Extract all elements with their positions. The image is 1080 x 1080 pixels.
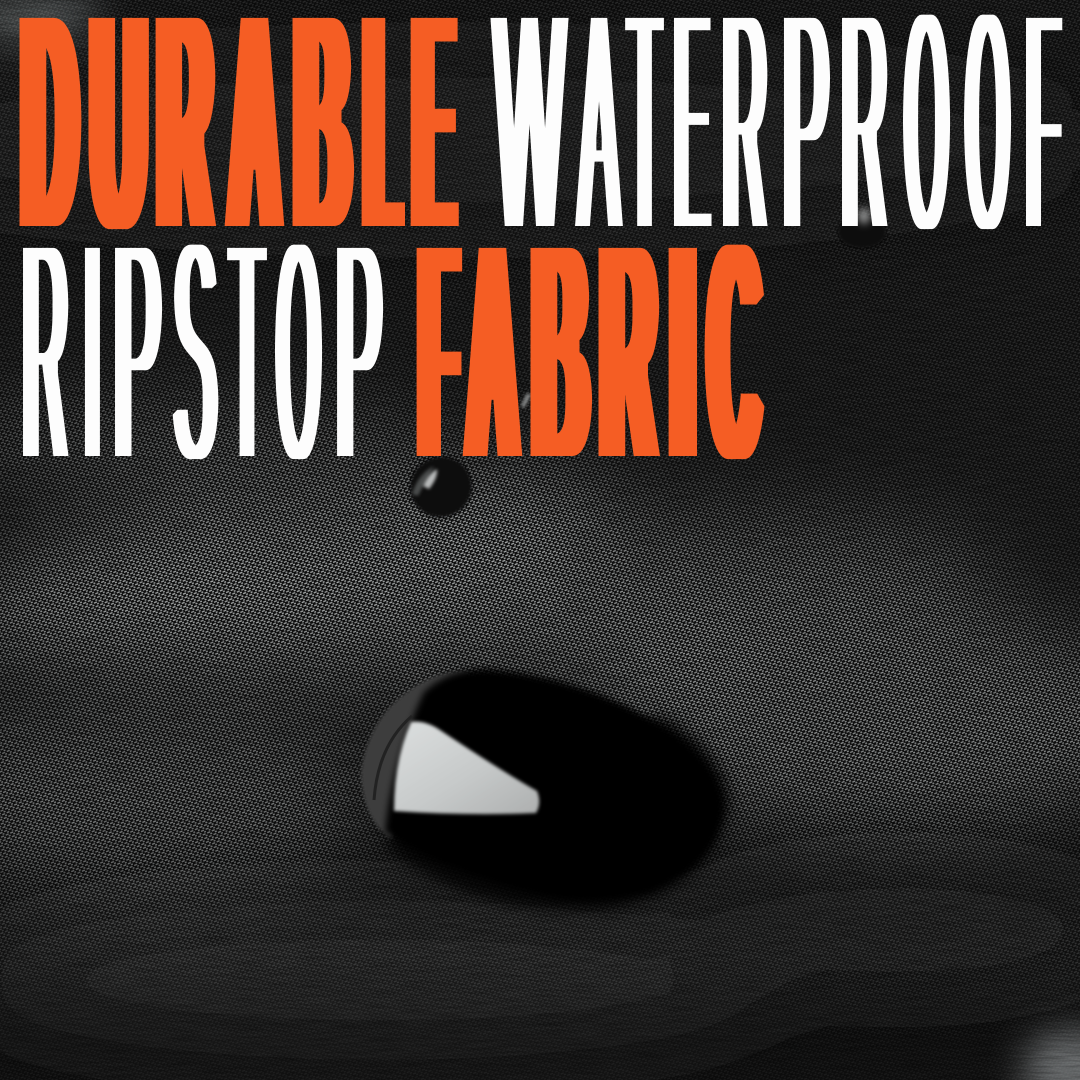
small water drop, right [838, 208, 886, 248]
title: white words [23, 0, 1059, 531]
tiny droplet highlight behind FABRIC [521, 393, 531, 408]
small water drop, centre [400, 447, 482, 527]
title: white words: T [231, 172, 263, 530]
title: orange words: I [671, 173, 695, 530]
bottom-right light corner [1023, 1030, 1080, 1080]
title: white words: R [23, 172, 68, 530]
title: orange words: A [468, 174, 517, 531]
title: white words: P [114, 173, 161, 531]
title: white words: S [174, 172, 216, 530]
drop rim [361, 671, 470, 838]
drop highlight [394, 722, 539, 814]
title: orange words [22, 0, 759, 531]
title: orange words: F [421, 173, 456, 530]
large water drop [361, 669, 730, 910]
title: orange words: B [534, 174, 588, 531]
top-left blurred fold [0, 0, 103, 40]
title: white words: I [85, 172, 100, 530]
title: orange words: R [602, 174, 655, 531]
drop shadow [385, 715, 730, 910]
title: white words: O [277, 172, 320, 530]
drop body [385, 669, 723, 901]
inner rim shadow [374, 716, 412, 800]
title: white words: P [336, 174, 382, 531]
title: orange words: C [710, 173, 759, 531]
